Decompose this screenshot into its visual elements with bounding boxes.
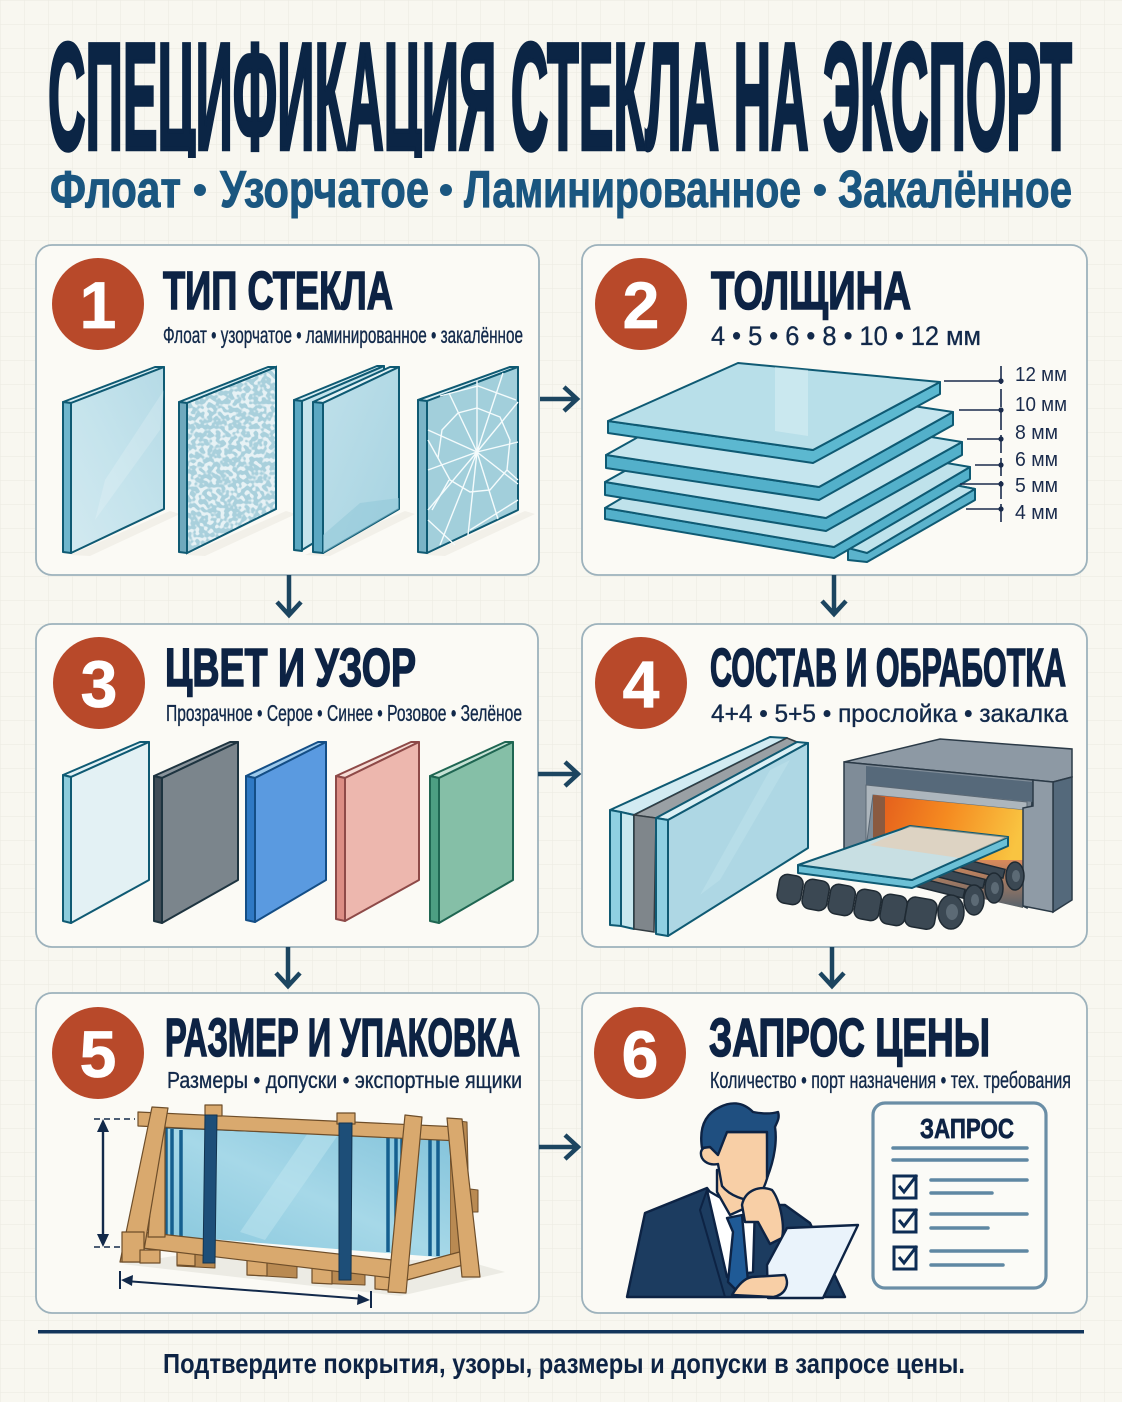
number badge 4 (595, 637, 687, 729)
arrow 1 to 2 (540, 387, 577, 411)
number badge 2: 2 (623, 268, 659, 342)
glass sheet in furnace (798, 826, 1008, 888)
width dimension (120, 1271, 371, 1308)
glass: tempered (418, 367, 535, 556)
glass stack (605, 363, 975, 562)
arrow 5 to 6 (539, 1135, 578, 1159)
form lines (893, 1148, 1027, 1265)
panel 2: толщина (582, 245, 1087, 575)
rollers (776, 855, 1024, 931)
height dimension (94, 1119, 135, 1247)
subheading: цвета: Прозрачное • Серое • Синее • Розовое • Зелёное (166, 700, 522, 726)
glass: clear (63, 742, 149, 923)
subheading: обработка: 4+4 • 5+5 • прослойка • закалка (711, 700, 1068, 728)
heading: цвет и узор: ЦВЕТ И УЗОР (165, 638, 416, 698)
arrow 3 to 5 (276, 947, 300, 986)
subtitle: • (813, 166, 827, 213)
panel 6: запрос цены (582, 993, 1087, 1313)
glass: laminated (294, 366, 415, 556)
glass: patterned (179, 365, 296, 556)
glass: blue (246, 742, 326, 922)
arrow 1 to 3 (277, 575, 301, 615)
subtitle: • (193, 166, 207, 213)
thickness scale: 10 мм (1015, 394, 1067, 416)
number badge 4: 4 (623, 647, 660, 721)
number badge 3 (53, 637, 145, 729)
number badge 1: 1 (80, 268, 116, 342)
panel 5: размер и упаковка (36, 993, 539, 1313)
thickness scale: 6 мм (1015, 449, 1058, 471)
number badge 6: 6 (622, 1017, 658, 1091)
subtitle: Флоат (50, 161, 181, 219)
laminated cross-section (610, 737, 808, 936)
thickness scale: 4 мм (1015, 502, 1058, 524)
arrow 2 to 4 (822, 575, 846, 614)
heading: запрос цены: ЗАПРОС ЦЕНЫ (709, 1008, 990, 1068)
request form (873, 1103, 1046, 1288)
glass: float (63, 367, 180, 556)
panel 1: тип стекла (36, 245, 539, 575)
furnace (844, 739, 1072, 912)
subtitle: Ламинированное (464, 161, 801, 219)
form title: ЗАПРОС (920, 1113, 1014, 1144)
heading: тип стекла: ТИП СТЕКЛА (163, 261, 393, 321)
glass: pink (336, 742, 419, 921)
businessman (627, 1103, 858, 1298)
heading: размер и упаковка: РАЗМЕР И УПАКОВКА (165, 1008, 520, 1068)
panel 3: цвет и узор (36, 624, 538, 947)
panel 4: состав и обработка (582, 624, 1087, 947)
number badge 6 (594, 1007, 686, 1099)
footer note: Подтвердите покрытия, узоры, размеры и допуски в запросе цены. (163, 1348, 965, 1379)
subtitle: • (439, 166, 453, 213)
number badge 5: 5 (80, 1017, 116, 1091)
thickness scale (944, 364, 1067, 524)
checkboxes (894, 1175, 917, 1269)
number badge 2 (595, 258, 687, 350)
arrow 4 to 6 (820, 947, 844, 986)
number badge 5 (52, 1007, 144, 1099)
thickness scale: 12 мм (1015, 364, 1067, 386)
subheading: размеры: Размеры • допуски • экспортные ящики (167, 1067, 522, 1093)
subheading: толщины: 4 • 5 • 6 • 8 • 10 • 12 мм (711, 321, 981, 351)
glass: green (430, 742, 513, 923)
thickness scale: 5 мм (1015, 475, 1058, 497)
glass: grey (154, 742, 238, 923)
thickness scale: 8 мм (1015, 422, 1058, 444)
number badge 1 (52, 258, 144, 350)
subtitle: Узорчатое (220, 161, 429, 219)
number badge 3: 3 (81, 647, 117, 721)
crate with glass (120, 1105, 505, 1296)
heading: толщина: ТОЛЩИНА (711, 261, 911, 321)
arrow 3 to 4 (538, 762, 578, 786)
subtitle (50, 161, 1072, 219)
subheading: типы стекла: Флоат • узорчатое • ламинированное • закалённое (163, 322, 523, 348)
footer rule (38, 1330, 1084, 1334)
